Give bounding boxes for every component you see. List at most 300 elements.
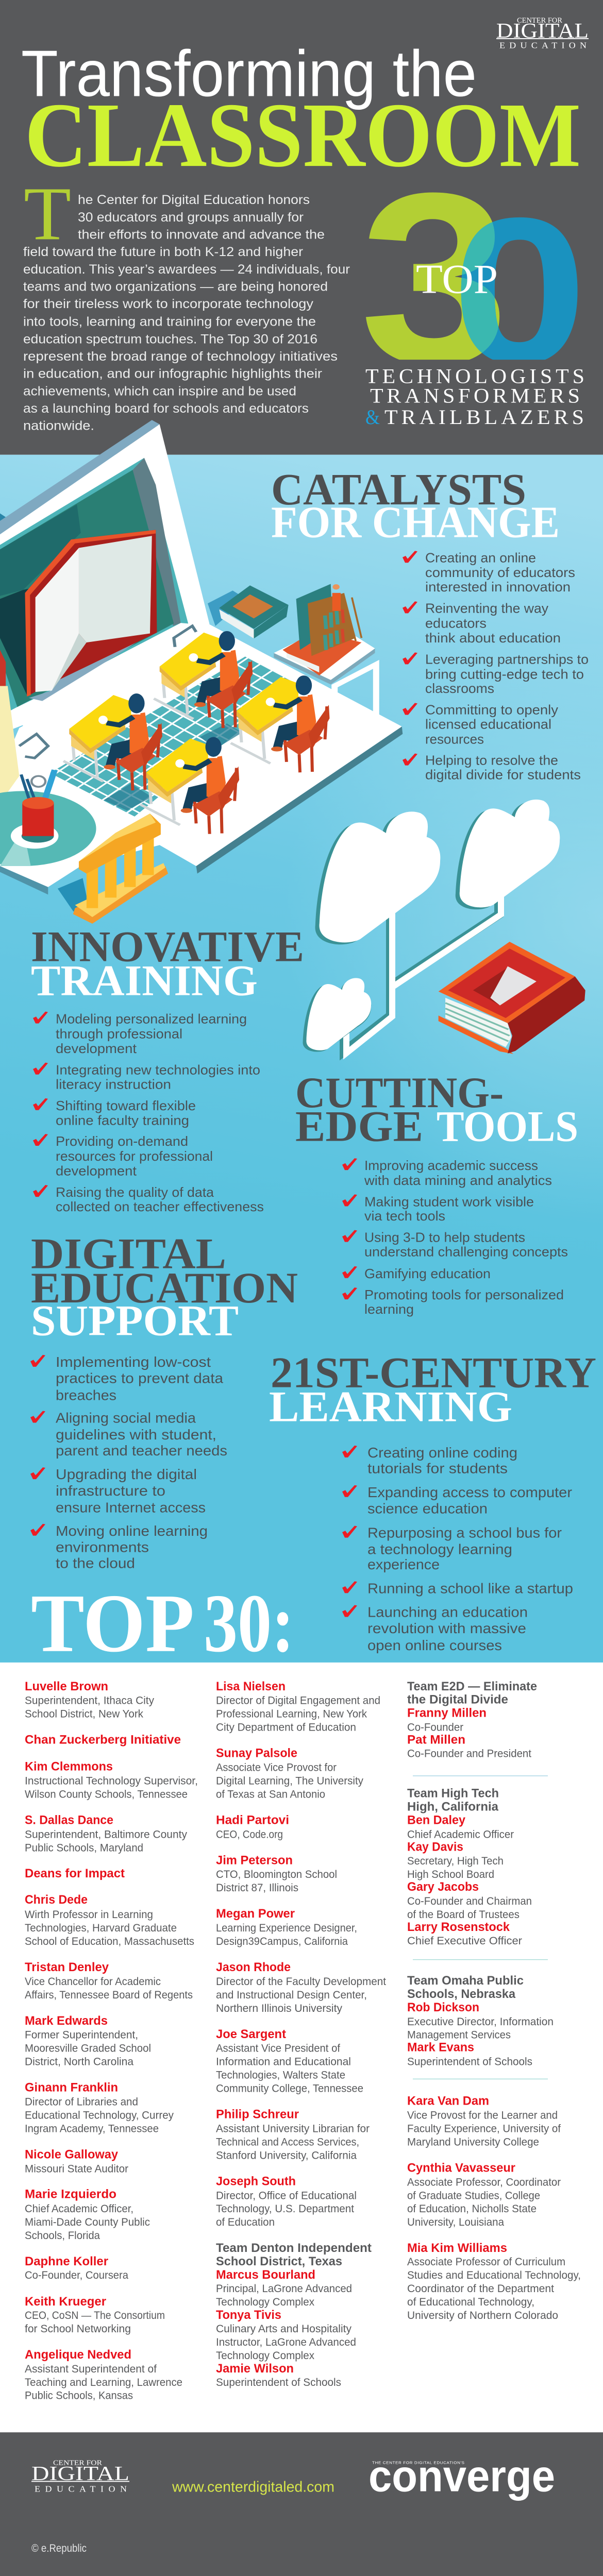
- logo: Converge: converge: [368, 2451, 555, 2501]
- heading: 21st-Century Learning: [269, 1348, 596, 1431]
- list: Digital Education Support: infrastructure to: [56, 1483, 165, 1499]
- logo: Center for Digital Education (footer): [31, 2459, 129, 2494]
- Mia Kim Williams: Mia Kim Williams: [407, 2242, 507, 2255]
- Angelique Nedved: Teaching and Learning, Lawrence: [25, 2376, 182, 2388]
- closed teal book: [219, 585, 289, 638]
- Kara Van Dam: Kara Van Dam: [407, 2094, 489, 2108]
- Keith Krueger: CEO, CoSN — The Consortium: [25, 2309, 165, 2321]
- Marie Izquierdo: Schools, Florida: [25, 2229, 100, 2242]
- intro paragraph: he Center for Digital Education honors: [78, 193, 310, 207]
- Nicole Galloway: [25, 2148, 128, 2175]
- Keith Krueger: Keith Krueger: [25, 2295, 106, 2309]
- heading: Digital Education Support: EDUCATION: [31, 1263, 298, 1312]
- heading: Digital Education Support: DIGITAL: [31, 1229, 226, 1278]
- list: Digital Education Support: Upgrading the digital: [56, 1467, 197, 1483]
- Mia Kim Williams: of Educational Technology,: [407, 2295, 534, 2308]
- list: Catalysts for Change: Reinventing the way: [425, 601, 549, 616]
- list: 21st-Century Learning: Repurposing a school bus for: [367, 1525, 562, 1541]
- logo: Center for Digital Education (header): [496, 16, 589, 50]
- heading: Top 30: [31, 1577, 294, 1669]
- roster column 3: [407, 1680, 581, 2321]
- Luvelle Brown: Superintendent, Ithaca City: [25, 1694, 154, 1707]
- Keith Krueger: [25, 2295, 165, 2335]
- Hadi Partovi: CEO, Code.org: [216, 1828, 283, 1840]
- intro paragraph: their efforts to innovate and advance the: [78, 228, 325, 242]
- intro paragraph: nationwide.: [23, 419, 94, 433]
- list: Catalysts for Change: bring cutting-edge tech to: [425, 667, 584, 682]
- list: 21st-Century Learning: Creating online coding: [367, 1445, 517, 1461]
- Top 30 graphic: [366, 193, 577, 360]
- list: Catalysts for Change: Creating an online: [425, 550, 536, 565]
- list: Catalysts for Change: Leveraging partnerships to: [425, 652, 589, 667]
- list: Innovative Training: development: [56, 1163, 137, 1179]
- Jim Peterson: [216, 1854, 337, 1894]
- heading: Catalysts for Change: FOR CHANGE: [271, 498, 560, 547]
- Top 30 graphic: TOP: [416, 256, 498, 302]
- heading: Top 30: 30:: [204, 1577, 294, 1669]
- footer panel: [0, 2432, 603, 2576]
- list: Catalysts for Change: Helping to resolve the: [425, 753, 558, 768]
- Angelique Nedved: Assistant Superintendent of: [25, 2362, 157, 2375]
- white arch: [334, 665, 376, 769]
- Team Denton: Marcus Bourland: [216, 2268, 315, 2282]
- heading: 21st-Century Learning: LEARNING: [269, 1382, 512, 1431]
- Philip Schreur: Technical and Access Services,: [216, 2136, 359, 2148]
- intro paragraph: into tools, learning and training for everyone the: [23, 315, 316, 329]
- Chris Dede: Technologies, Harvard Graduate: [25, 1921, 177, 1934]
- logo: Center for Digital Education (footer): DIGITAL: [31, 2462, 129, 2484]
- list: Digital Education Support: guidelines with student,: [56, 1427, 216, 1443]
- logo: Center for Digital Education (header): DIGITAL: [496, 19, 589, 43]
- Lisa Nielsen: Director of Digital Engagement and: [216, 1694, 380, 1707]
- Kim Clemmons: Wilson County Schools, Tennessee: [25, 1788, 188, 1800]
- tagline: technologists, transformers and trailblazers: [365, 364, 584, 429]
- list: Digital Education Support: [30, 1354, 227, 1571]
- list: Innovative Training: collected on teacher effectiveness: [56, 1199, 264, 1214]
- Jason Rhode: Director of the Faculty Development: [216, 1975, 386, 1988]
- heading: Cutting-Edge Tools: EDGE: [295, 1102, 423, 1150]
- Chris Dede: Wirth Professor in Learning: [25, 1908, 153, 1921]
- Joe Sargent: [216, 2027, 363, 2094]
- student desk 1: [154, 631, 253, 728]
- S. Dallas Dance: Public Schools, Maryland: [25, 1841, 143, 1854]
- Cynthia Vavasseur: University, Louisiana: [407, 2216, 504, 2228]
- list: Innovative Training: resources for professional: [56, 1148, 213, 1164]
- Tristan Denley: Affairs, Tennessee Board of Regents: [25, 1988, 193, 2001]
- tagline: technologists, transformers and trailblazers: TECHNOLOGISTS: [365, 364, 584, 387]
- Philip Schreur: Philip Schreur: [216, 2108, 299, 2121]
- Team Denton: Technology Complex: [216, 2295, 314, 2308]
- intro paragraph: teams and two organizations — are being honored: [23, 280, 328, 294]
- Hadi Partovi: [216, 1814, 289, 1840]
- list: Digital Education Support: Aligning social media: [56, 1410, 196, 1426]
- heading: 21st-Century Learning: 21ST-CENTURY: [271, 1348, 596, 1397]
- heading: Digital Education Support: SUPPORT: [31, 1296, 239, 1345]
- Marie Izquierdo: Miami-Dade County Public: [25, 2216, 150, 2228]
- heading: Innovative Training: INNOVATIVE: [31, 922, 304, 971]
- Chan Zuckerberg Initiative: Chan Zuckerberg Initiative: [25, 1733, 181, 1747]
- list: Digital Education Support: environments: [56, 1539, 149, 1555]
- list: 21st-Century Learning: experience: [367, 1557, 440, 1573]
- Team High Tech High: Larry Rosenstock: [407, 1920, 510, 1934]
- list: Catalysts for Change: interested in innovation: [425, 580, 571, 595]
- heading: Cutting-Edge Tools: [295, 1069, 578, 1150]
- Joseph South: Technology, U.S. Department: [216, 2202, 354, 2215]
- list: 21st-Century Learning: Launching an education: [367, 1604, 528, 1620]
- cloud network connectors: [344, 887, 501, 1053]
- Team Omaha Public Schools: Superintendent of Schools: [407, 2055, 532, 2068]
- Jason Rhode: [216, 1960, 386, 2014]
- copyright: © e.Republic: [31, 2541, 87, 2554]
- intro paragraph: in education, and our infographic highlights their: [23, 367, 323, 381]
- Kim Clemmons: [25, 1760, 198, 1800]
- Top 30 graphic: 0: [451, 175, 588, 407]
- Team High Tech High: Secretary, High Tech: [407, 1855, 504, 1867]
- blue panel highlight: [258, 644, 603, 1239]
- list: 21st-Century Learning: a technology learning: [367, 1541, 512, 1557]
- Sunay Palsole: [216, 1747, 363, 1800]
- list: Catalysts for Change: resources: [425, 732, 484, 747]
- shadow behind books: [208, 590, 246, 626]
- Ginann Franklin: Ginann Franklin: [25, 2081, 118, 2094]
- list: Innovative Training: Providing on-demand: [56, 1134, 188, 1149]
- Megan Power: Learning Experience Designer,: [216, 1921, 357, 1934]
- intro paragraph: as a launching board for schools and educators: [23, 401, 309, 416]
- intro paragraph: for their tireless work to incorporate technology: [23, 297, 313, 311]
- list: Innovative Training: development: [56, 1041, 137, 1056]
- list: 21st-Century Learning: Expanding access to computer: [367, 1484, 572, 1501]
- Joe Sargent: Technologies, Walters State: [216, 2069, 345, 2081]
- Megan Power: Megan Power: [216, 1907, 295, 1921]
- Team High Tech High: Ben Daley: [407, 1814, 465, 1827]
- heading: Cutting-Edge Tools: CUTTING-: [295, 1069, 504, 1117]
- Chris Dede: School of Education, Massachusetts: [25, 1935, 194, 1947]
- Daphne Koller: Daphne Koller: [25, 2255, 108, 2268]
- Joe Sargent: Joe Sargent: [216, 2027, 286, 2041]
- Marie Izquierdo: [25, 2188, 150, 2242]
- list: Digital Education Support: breaches: [56, 1387, 116, 1403]
- Kara Van Dam: Faculty Experience, University of: [407, 2122, 561, 2134]
- Hadi Partovi: Hadi Partovi: [216, 1814, 289, 1827]
- list: Cutting-Edge Tools: Promoting tools for personalized: [364, 1287, 564, 1302]
- Ginann Franklin: Ingram Academy, Tennessee: [25, 2122, 159, 2134]
- student desk 4: [140, 737, 239, 834]
- Team Omaha Public Schools: Management Services: [407, 2028, 511, 2041]
- lamp beam at left edge: [0, 650, 19, 803]
- Daphne Koller: [25, 2255, 128, 2281]
- list: 21st-Century Learning: tutorials for students: [367, 1461, 508, 1477]
- list: Innovative Training: online faculty training: [56, 1113, 189, 1128]
- Luvelle Brown: [25, 1680, 154, 1720]
- laptop back shadow: [0, 513, 7, 522]
- list: Catalysts for Change: educators: [425, 616, 487, 631]
- student desk 2: [63, 693, 162, 790]
- Jason Rhode: and Instructional Design Center,: [216, 1988, 367, 2001]
- Mia Kim Williams: Associate Professor of Curriculum: [407, 2256, 565, 2268]
- list: Catalysts for Change: community of educators: [425, 565, 575, 580]
- S. Dallas Dance: Superintendent, Baltimore County: [25, 1828, 187, 1840]
- Kim Clemmons: Instructional Technology Supervisor,: [25, 1774, 198, 1787]
- heading: Catalysts for Change: [271, 465, 560, 547]
- Team High Tech High: Chief Executive Officer: [407, 1934, 522, 1947]
- Lisa Nielsen: Professional Learning, New York: [216, 1707, 367, 1720]
- intro paragraph: education spectrum touches. The Top 30 of 2016: [23, 332, 317, 346]
- Ginann Franklin: Educational Technology, Currey: [25, 2109, 174, 2121]
- Team High Tech High: Gary Jacobs: [407, 1880, 479, 1894]
- Nicole Galloway: Missouri State Auditor: [25, 2162, 128, 2175]
- Joseph South: of Education: [216, 2216, 275, 2228]
- logo: Center for Digital Education (footer): CENTER FOR: [53, 2459, 103, 2467]
- list: 21st-Century Learning: science education: [367, 1501, 488, 1517]
- Team E2D: Pat Millen: [407, 1733, 465, 1747]
- Team Omaha Public Schools: [407, 1974, 554, 2068]
- Joe Sargent: Information and Educational: [216, 2055, 351, 2068]
- Cynthia Vavasseur: of Graduate Studies, College: [407, 2189, 540, 2201]
- Team High Tech High: Kay Davis: [407, 1840, 463, 1854]
- Sunay Palsole: of Texas at San Antonio: [216, 1788, 325, 1800]
- list: 21st-Century Learning: open online courses: [367, 1637, 502, 1654]
- logo: Center for Digital Education (header): EDUCATION: [499, 40, 587, 50]
- heading: Cutting-Edge Tools: TOOLS: [437, 1102, 578, 1150]
- list: Catalysts for Change: think about education: [425, 631, 561, 646]
- list: Catalysts for Change: Committing to openly: [425, 702, 559, 717]
- Joseph South: [216, 2175, 357, 2228]
- Kara Van Dam: Vice Provost for the Learner and: [407, 2109, 558, 2121]
- Team Denton: Superintendent of Schools: [216, 2376, 341, 2388]
- laptop base: [0, 624, 403, 894]
- S. Dallas Dance: [25, 1814, 187, 1854]
- Marie Izquierdo: Marie Izquierdo: [25, 2188, 116, 2201]
- Daphne Koller: Co-Founder, Coursera: [25, 2268, 128, 2281]
- list: Digital Education Support: Implementing low-cost: [56, 1354, 211, 1370]
- roster column 1: [25, 1680, 198, 2402]
- Mia Kim Williams: Coordinator of the Department: [407, 2282, 554, 2295]
- Mark Edwards: District, North Carolina: [25, 2055, 133, 2068]
- list: Catalysts for Change: digital divide for students: [425, 767, 581, 782]
- Team Denton: Team Denton Independent: [216, 2242, 372, 2255]
- Team Denton: Technology Complex: [216, 2349, 314, 2362]
- intro paragraph: [23, 193, 350, 433]
- Team E2D: Franny Millen: [407, 1706, 487, 1720]
- Team Denton: Culinary Arts and Hospitality: [216, 2322, 351, 2335]
- intro paragraph: represent the broad range of technology initiatives: [23, 349, 338, 364]
- heading: Innovative Training: [31, 922, 304, 1005]
- Joseph South: Joseph South: [216, 2175, 296, 2188]
- Mia Kim Williams: [407, 2242, 581, 2321]
- Ginann Franklin: Director of Libraries and: [25, 2095, 138, 2108]
- Lisa Nielsen: [216, 1680, 380, 1734]
- list: Catalysts for Change: [403, 550, 589, 782]
- Team Denton: Jamie Wilson: [216, 2362, 294, 2376]
- Kara Van Dam: Maryland University College: [407, 2136, 539, 2148]
- Team Denton: [216, 2242, 372, 2388]
- logo: Center for Digital Education (footer): EDUCATION: [35, 2484, 127, 2494]
- heading: Innovative Training: TRAINING: [31, 956, 258, 1005]
- Mia Kim Williams: Studies and Educational Technology,: [407, 2268, 581, 2281]
- Tristan Denley: Vice Chancellor for Academic: [25, 1975, 161, 1988]
- list: Cutting-Edge Tools: Making student work visible: [364, 1194, 534, 1209]
- Team Omaha Public Schools: Team Omaha Public: [407, 1974, 524, 1988]
- illustration: isometric classroom on a laptop: [0, 420, 403, 924]
- Team E2D: the Digital Divide: [407, 1693, 508, 1707]
- Top 30 graphic: 0: [451, 175, 588, 407]
- Mark Edwards: Mooresville Graded School: [25, 2042, 151, 2055]
- list: Cutting-Edge Tools: via tech tools: [364, 1209, 445, 1224]
- list: Cutting-Edge Tools: [342, 1158, 568, 1317]
- Team E2D: Co-Founder: [407, 1721, 463, 1734]
- cloud B: [456, 800, 560, 909]
- list: Innovative Training: Modeling personalized learning: [56, 1011, 247, 1026]
- Jim Peterson: District 87, Illinois: [216, 1882, 298, 1894]
- bookshelf on book: [274, 584, 375, 685]
- list: Cutting-Edge Tools: understand challenging concepts: [364, 1244, 568, 1259]
- Sunay Palsole: Digital Learning, The University: [216, 1774, 363, 1787]
- drop cap T: T: [24, 171, 71, 256]
- Joe Sargent: Assistant Vice President of: [216, 2042, 341, 2055]
- list: Cutting-Edge Tools: with data mining and analytics: [364, 1173, 552, 1188]
- cloud C: [303, 978, 371, 1052]
- Philip Schreur: Stanford University, California: [216, 2149, 357, 2161]
- Megan Power: Design39Campus, California: [216, 1935, 348, 1947]
- Cynthia Vavasseur: Cynthia Vavasseur: [407, 2161, 515, 2175]
- Team Denton: Principal, LaGrone Advanced: [216, 2282, 352, 2295]
- Deans for Impact: Deans for Impact: [25, 1867, 125, 1880]
- laptop screen: [0, 420, 210, 734]
- Team Denton: Instructor, LaGrone Advanced: [216, 2335, 356, 2348]
- blue content panel: [0, 455, 603, 1663]
- title: Transforming the: Transforming the: [21, 38, 477, 110]
- Tristan Denley: Tristan Denley: [25, 1960, 109, 1974]
- list: Catalysts for Change: classrooms: [425, 681, 494, 696]
- list: 21st-Century Learning: [342, 1445, 573, 1654]
- pen cup: [21, 770, 55, 843]
- Kara Van Dam: [407, 2094, 561, 2148]
- Luvelle Brown: School District, New York: [25, 1707, 143, 1720]
- Jim Peterson: Jim Peterson: [216, 1854, 293, 1867]
- Team Denton: School District, Texas: [216, 2255, 342, 2268]
- Team Denton: Tonya Tivis: [216, 2308, 281, 2322]
- Ginann Franklin: [25, 2081, 174, 2134]
- Cynthia Vavasseur: Associate Professor, Coordinator: [407, 2176, 561, 2188]
- tagline: technologists, transformers and trailblazers: &: [365, 405, 380, 429]
- list: Cutting-Edge Tools: learning: [364, 1301, 414, 1317]
- Team High Tech High: of the Board of Trustees: [407, 1908, 520, 1921]
- Team High Tech High: Team High Tech: [407, 1787, 499, 1800]
- list: Cutting-Edge Tools: Using 3-D to help students: [364, 1230, 525, 1245]
- Mark Edwards: [25, 2014, 151, 2068]
- Team Omaha Public Schools: Rob Dickson: [407, 2001, 479, 2014]
- building shadow: [58, 878, 92, 923]
- Team Omaha Public Schools: Executive Director, Information: [407, 2015, 554, 2028]
- list: Innovative Training: literacy instruction: [56, 1077, 171, 1092]
- Lisa Nielsen: City Department of Education: [216, 1721, 356, 1734]
- header panel: [0, 0, 603, 455]
- list: Cutting-Edge Tools: Gamifying education: [364, 1266, 491, 1281]
- Team E2D: Team E2D — Eliminate: [407, 1680, 537, 1693]
- Team E2D: [407, 1680, 537, 1759]
- Tristan Denley: [25, 1960, 193, 2001]
- list: Digital Education Support: Moving online learning: [56, 1523, 208, 1539]
- Cynthia Vavasseur: [407, 2161, 561, 2228]
- list: Cutting-Edge Tools: Improving academic success: [364, 1158, 538, 1173]
- Jason Rhode: Northern Illinois University: [216, 2002, 342, 2014]
- roster panel: [0, 1663, 603, 2432]
- Team High Tech High: High School Board: [407, 1868, 494, 1880]
- intro paragraph: education. This year’s awardees — 24 individuals, four: [23, 262, 350, 277]
- list: 21st-Century Learning: Running a school like a startup: [367, 1581, 573, 1597]
- cloud A: [315, 811, 440, 944]
- Mark Edwards: Former Superintendent,: [25, 2028, 138, 2041]
- Jim Peterson: CTO, Bloomington School: [216, 1868, 337, 1880]
- list: Digital Education Support: practices to prevent data: [56, 1370, 223, 1386]
- heading: Digital Education Support: [31, 1229, 298, 1345]
- heading: Catalysts for Change: CATALYSTS: [271, 465, 526, 514]
- list: Digital Education Support: to the cloud: [56, 1555, 135, 1571]
- list: Digital Education Support: parent and teacher needs: [56, 1443, 227, 1459]
- Luvelle Brown: Luvelle Brown: [25, 1680, 108, 1693]
- Angelique Nedved: Public Schools, Kansas: [25, 2389, 133, 2402]
- Team High Tech High: Chief Academic Officer: [407, 1828, 514, 1840]
- list: Catalysts for Change: licensed educational: [425, 717, 551, 732]
- Team E2D: Co-Founder and President: [407, 1747, 531, 1759]
- list: Innovative Training: through professional: [56, 1026, 182, 1041]
- Mark Edwards: Mark Edwards: [25, 2014, 108, 2028]
- list: 21st-Century Learning: revolution with massive: [367, 1621, 526, 1637]
- Angelique Nedved: Angelique Nedved: [25, 2348, 131, 2362]
- Team High Tech High: High, California: [407, 1800, 498, 1814]
- Sunay Palsole: Associate Vice Provost for: [216, 1761, 337, 1773]
- Top 30 graphic: 3: [360, 142, 509, 415]
- Joe Sargent: Community College, Tennessee: [216, 2082, 363, 2094]
- tagline: technologists, transformers and trailblazers: TRAILBLAZERS: [384, 405, 584, 429]
- Megan Power: [216, 1907, 357, 1947]
- website URL: www.centerdigitaled.com: [172, 2479, 334, 2495]
- Team Omaha Public Schools: Schools, Nebraska: [407, 1987, 515, 2001]
- Team High Tech High: Co-Founder and Chairman: [407, 1895, 532, 1907]
- intro paragraph: achievements, which can inspire and be used: [23, 384, 296, 398]
- list: Innovative Training: Integrating new technologies into: [56, 1062, 260, 1077]
- logo: Converge: THE CENTER FOR DIGITAL EDUCATION'S: [372, 2461, 464, 2465]
- Philip Schreur: Assistant University Librarian for: [216, 2122, 370, 2134]
- Mia Kim Williams: University of Northern Colorado: [407, 2309, 558, 2321]
- Keith Krueger: for School Networking: [25, 2322, 131, 2335]
- Team Omaha Public Schools: Mark Evans: [407, 2041, 474, 2055]
- Angelique Nedved: [25, 2348, 182, 2402]
- red book with stairs: [439, 942, 585, 1054]
- heading: Top 30: TOP: [31, 1577, 194, 1669]
- list: Innovative Training: Shifting toward flexible: [56, 1098, 196, 1113]
- logo: Center for Digital Education (header): CENTER FOR: [517, 16, 562, 25]
- student desk 3: [231, 675, 329, 772]
- intro paragraph: 30 educators and groups annually for: [78, 210, 304, 225]
- Jason Rhode: Jason Rhode: [216, 1960, 291, 1974]
- Chris Dede: Chris Dede: [25, 1893, 88, 1907]
- Marie Izquierdo: Chief Academic Officer,: [25, 2202, 133, 2215]
- open book on the screen: [25, 530, 157, 697]
- S. Dallas Dance: S. Dallas Dance: [25, 1814, 113, 1827]
- list: Innovative Training: Raising the quality of data: [56, 1185, 214, 1200]
- Chris Dede: [25, 1893, 194, 1947]
- Cynthia Vavasseur: of Education, Nicholls State: [407, 2202, 537, 2215]
- Team High Tech High: [407, 1787, 532, 1947]
- tiled classroom floor: [50, 656, 298, 817]
- list: Innovative Training: [33, 1011, 264, 1214]
- roster column 2: [216, 1680, 386, 2388]
- Sunay Palsole: Sunay Palsole: [216, 1747, 297, 1760]
- list: Digital Education Support: ensure Internet access: [56, 1500, 206, 1516]
- intro paragraph: field toward the future in both K-12 and higher: [23, 245, 304, 259]
- Lisa Nielsen: Lisa Nielsen: [216, 1680, 286, 1693]
